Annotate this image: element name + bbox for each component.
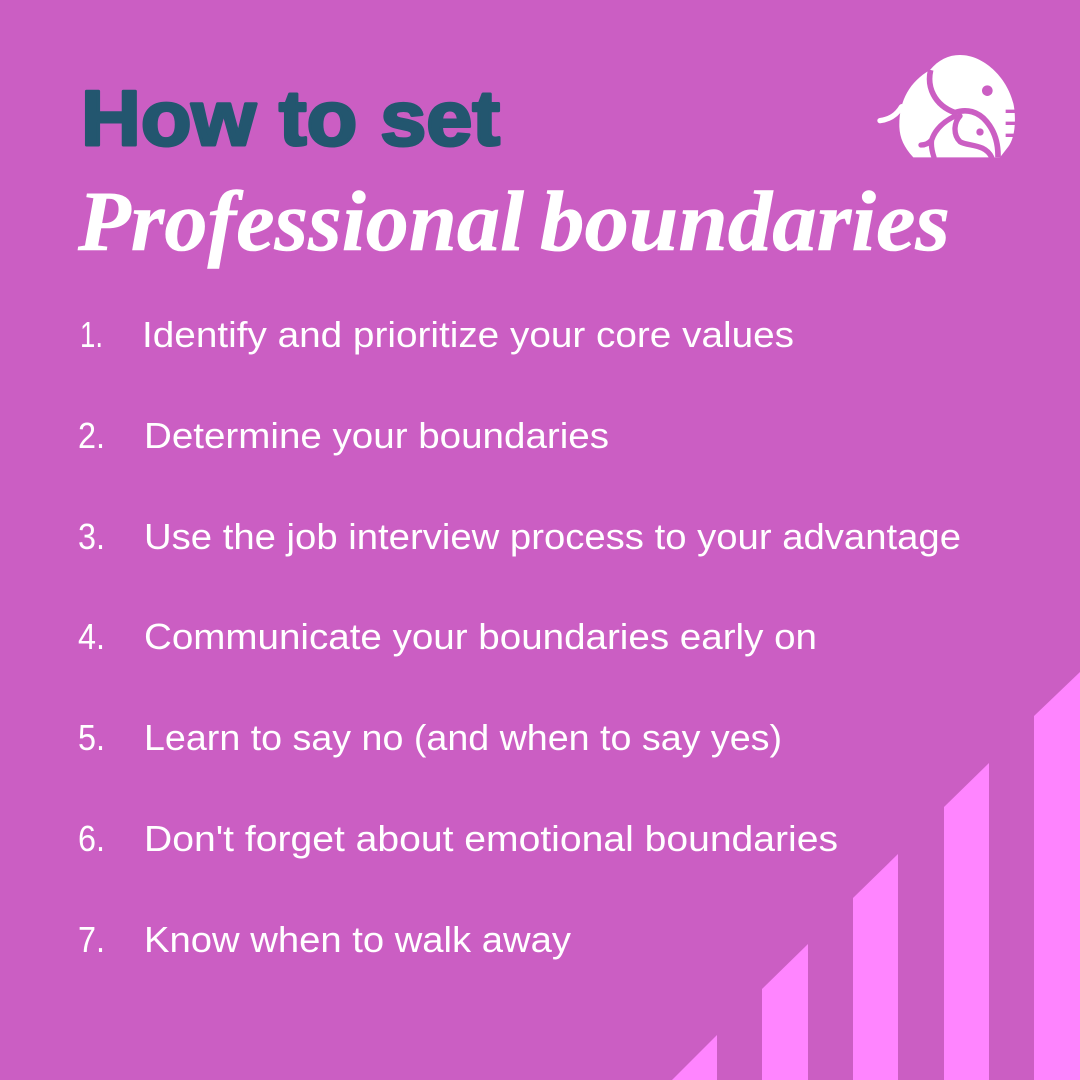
list item 3: Use the job interview process to your advantage (144, 516, 961, 557)
head outline (930, 70, 998, 157)
list item 4: Communicate your boundaries early on (144, 616, 817, 657)
list item 4: 4. (78, 616, 105, 657)
title: Professional boundaries: Professional (77, 173, 524, 269)
list item 3: 3. (78, 516, 105, 557)
calf eye (976, 128, 984, 136)
elephant eye (982, 85, 993, 96)
elephant body (899, 55, 1015, 157)
list item 2: 2. (78, 415, 105, 456)
list item 1: 1. (80, 314, 103, 355)
list item 5: 5. (78, 717, 105, 758)
list item 1: Identify and prioritize your core values (142, 314, 794, 355)
list item 6: 6. (78, 818, 105, 859)
rising bars decoration (672, 672, 1080, 1080)
list item 7: Know when to walk away (144, 919, 571, 960)
list item 5: Learn to say no (and when to say yes) (144, 717, 782, 758)
elephant tail (880, 107, 902, 121)
list item 7: 7. (78, 919, 105, 960)
calf outline (921, 116, 992, 157)
title: How to set: How to set (81, 74, 500, 162)
title: Professional boundaries: boundaries (540, 173, 950, 269)
icon: elephant with calf logo (880, 55, 1017, 157)
tusk stripes (1006, 111, 1017, 135)
list item 2: Determine your boundaries (144, 415, 609, 456)
list item 6: Don't forget about emotional boundaries (144, 818, 838, 859)
